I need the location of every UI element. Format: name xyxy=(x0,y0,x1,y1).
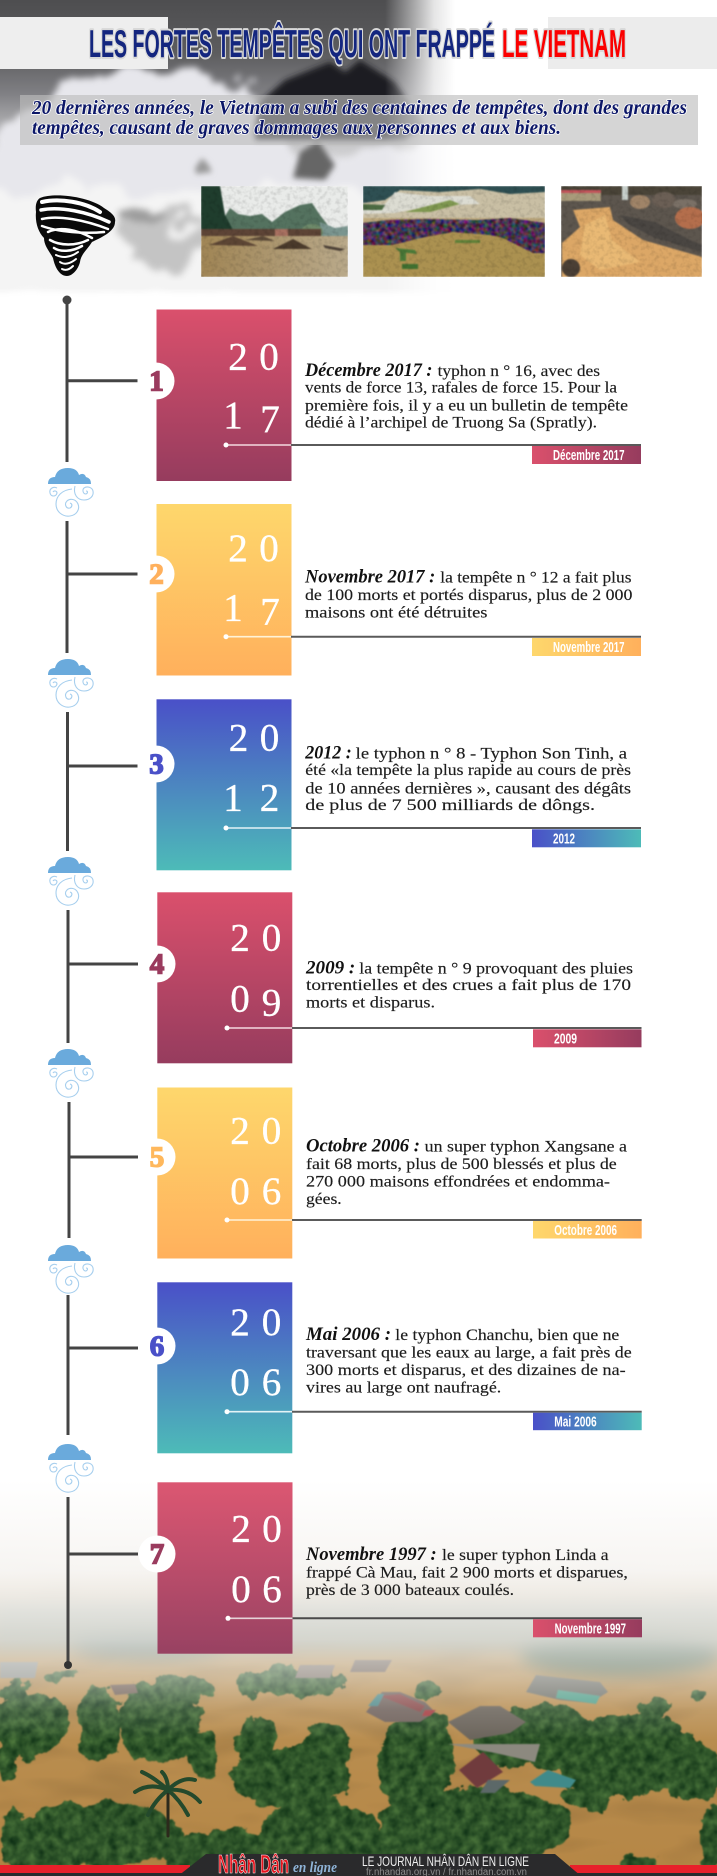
text block 4: la tempête n ° 9 provoquant des pluies xyxy=(359,958,633,977)
background: storm sky and waves xyxy=(0,0,448,290)
year card 3: 0 xyxy=(260,717,279,760)
icon: cloud and wind 4 xyxy=(48,1049,93,1097)
year card 5: 2 xyxy=(230,1109,250,1152)
year card 1: 1 xyxy=(223,394,243,437)
number badge 4: 4 xyxy=(150,948,164,980)
photo: flooded houses by karst hills xyxy=(201,186,348,277)
text block 1: première fois, il y a eu un bulletin de tempête xyxy=(305,396,628,415)
text block 3: été «la tempête la plus rapide au cours de près xyxy=(305,760,631,779)
text block 7: le super typhon Linda a xyxy=(442,1545,609,1564)
icon: cloud and wind 6 xyxy=(48,1444,93,1492)
date rule and tag 6: Mai 2006 xyxy=(554,1414,597,1431)
year card 6: 0 xyxy=(262,1301,281,1344)
timeline segment 3 xyxy=(68,712,138,851)
text block 6: le typhon Chanchu, bien que ne xyxy=(395,1325,619,1344)
year card 4: 9 xyxy=(262,982,281,1025)
number badge 5: 5 xyxy=(150,1142,164,1174)
text block 1 xyxy=(304,361,628,432)
footer text xyxy=(362,1853,529,1876)
year card 4: 0 xyxy=(230,978,250,1021)
year card 6: 2 xyxy=(230,1301,250,1344)
text block 2: de 100 morts et portés disparus, plus de 2 000 xyxy=(305,585,632,604)
year card 5 xyxy=(157,1088,292,1258)
year card 3: 2 xyxy=(260,777,279,820)
date rule and tag 6 xyxy=(292,1412,642,1431)
year card 5: 0 xyxy=(262,1109,281,1152)
icon: cloud and wind 1 xyxy=(48,468,93,516)
year card 3: 1 xyxy=(223,777,243,820)
text block 6: traversant que les eaux au large, a fait près de xyxy=(306,1342,632,1361)
number badge 3: 3 xyxy=(149,748,164,780)
entry 4 xyxy=(68,892,642,1063)
year card 7: 0 xyxy=(262,1508,282,1551)
text block 7: près de 3 000 bateaux coulés. xyxy=(306,1580,514,1599)
timeline segment 2 xyxy=(67,521,138,653)
date rule and tag 2: Novembre 2017 xyxy=(553,639,624,656)
text block 1: Décembre 2017 : xyxy=(304,361,432,381)
number badge 1: 1 xyxy=(149,366,164,398)
text block 1: vents de force 13, rafales de force 15. Pour la xyxy=(305,378,617,397)
text block 5: un super typhon Xangsane a xyxy=(425,1137,627,1156)
logo: Nhân Dân en ligne: en ligne xyxy=(293,1860,337,1876)
text block 6: 300 morts et disparus, et des dizaines de na- xyxy=(306,1360,626,1379)
photo: muddy torrent and rocks xyxy=(561,186,705,277)
year card 4: 2 xyxy=(230,917,250,960)
text block 4: torrentielles et des crues a fait plus de 170 xyxy=(306,975,631,994)
date rule and tag 3: 2012 xyxy=(553,830,575,847)
intro box xyxy=(20,95,698,145)
text block 2 xyxy=(304,568,632,622)
photo: flooded village aerial xyxy=(363,186,545,277)
timeline segment 1 xyxy=(67,300,138,462)
date rule and tag 4 xyxy=(292,1028,642,1047)
timeline: start dot xyxy=(62,296,72,304)
year card 7: 6 xyxy=(262,1568,282,1611)
text block 4: morts et disparus. xyxy=(306,993,435,1012)
year card 2: 1 xyxy=(223,587,243,630)
date rule and tag 7: Novembre 1997 xyxy=(555,1620,626,1637)
text block 4 xyxy=(305,958,633,1012)
date rule and tag 3 xyxy=(291,828,641,847)
entry 5 xyxy=(69,1088,642,1258)
entry 6 xyxy=(68,1282,642,1453)
text block 5 xyxy=(306,1137,627,1208)
date rule and tag 2 xyxy=(291,637,641,656)
date rule and tag 5: Octobre 2006 xyxy=(554,1222,617,1239)
timeline segment 6 xyxy=(68,1295,138,1435)
year card 1: 2 xyxy=(228,335,248,378)
number badge 4 xyxy=(138,946,176,982)
icon: cloud and wind 2 xyxy=(48,659,93,707)
text block 5: gées. xyxy=(306,1189,342,1208)
year card 6 xyxy=(157,1282,292,1453)
text block 7: Novembre 1997 : xyxy=(305,1545,437,1565)
year card 1: 0 xyxy=(259,335,279,378)
year card 3 xyxy=(156,699,292,870)
number badge 5 xyxy=(138,1138,176,1176)
background photo: flooded village at the bottom xyxy=(0,1536,717,1867)
text block 7 xyxy=(305,1545,628,1599)
year card 7: 0 xyxy=(231,1568,251,1611)
year card 1 xyxy=(156,310,292,481)
number badge 3 xyxy=(138,746,174,782)
text block 3: le typhon n ° 8 - Typhon Son Tinh, a xyxy=(356,743,627,762)
text block 3 xyxy=(304,743,631,814)
date rule and tag 7 xyxy=(292,1618,642,1637)
icon: cloud and wind 3 xyxy=(48,857,93,905)
icon: cloud and wind 5 xyxy=(48,1245,93,1293)
year card 2: 2 xyxy=(228,527,248,570)
entry 1 xyxy=(67,300,641,481)
text block 1: typhon n ° 16, avec des xyxy=(438,361,600,380)
year card 5: 0 xyxy=(230,1170,250,1213)
text block 7: frappé Cà Mau, fait 2 900 morts et disparues, xyxy=(306,1562,628,1581)
year card 3: 2 xyxy=(229,717,248,760)
year card 5: 6 xyxy=(262,1170,281,1213)
footer band xyxy=(0,1849,717,1876)
entry 2 xyxy=(67,504,641,676)
title bar left xyxy=(0,17,168,69)
palm tree xyxy=(135,1772,200,1836)
timeline segment 7 xyxy=(68,1497,138,1665)
date rule and tag 1 xyxy=(291,445,641,464)
entry 7 xyxy=(64,1482,642,1669)
date rule and tag 1: Décembre 2017 xyxy=(553,447,624,464)
number badge 2: 2 xyxy=(149,558,164,590)
text block 6: vires au large ont naufragé. xyxy=(306,1377,501,1396)
entry 3 xyxy=(68,699,641,870)
text block 6: Mai 2006 : xyxy=(305,1325,391,1345)
footer text: LE JOURNAL NHÂN DÂN EN LIGNE xyxy=(362,1853,529,1869)
number badge 6: 6 xyxy=(150,1330,164,1362)
year card 6: 6 xyxy=(262,1361,281,1404)
text block 5: Octobre 2006 : xyxy=(306,1137,420,1157)
text block 1: dédié à l’archipel de Truong Sa (Spratly). xyxy=(305,413,597,432)
year card 2: 7 xyxy=(260,591,280,634)
year card 1: 7 xyxy=(260,398,280,441)
date rule and tag 4: 2009 xyxy=(554,1030,577,1047)
text block 3: de plus de 7 500 milliards de dôngs. xyxy=(305,795,595,814)
year card 2 xyxy=(156,504,292,676)
text block 2: Novembre 2017 : xyxy=(304,568,435,588)
year card 2: 0 xyxy=(259,527,279,570)
intro box: 20 dernières années, le Vietnam a subi des centaines de tempêtes, dont des grandes xyxy=(31,97,687,119)
number badge 2 xyxy=(138,556,174,592)
timeline segment 5 xyxy=(69,1102,138,1238)
timeline segment 4 xyxy=(68,910,138,1043)
year card 4: 0 xyxy=(262,917,281,960)
text block 3: de 10 années dernières », causant des dégâts xyxy=(305,778,631,797)
number badge 1 xyxy=(138,362,174,400)
text block 2: maisons ont été détruites xyxy=(305,603,487,622)
year card 6: 0 xyxy=(230,1361,250,1404)
text block 5: 270 000 maisons effondrées et endomma- xyxy=(306,1172,610,1191)
title bar right xyxy=(548,17,717,69)
text block 6 xyxy=(305,1325,632,1396)
date rule and tag 5 xyxy=(292,1220,642,1239)
timeline: end dot xyxy=(64,1661,72,1669)
number badge 6 xyxy=(138,1328,176,1364)
text block 3: 2012 : xyxy=(304,743,352,763)
text block 2: la tempête n ° 12 a fait plus xyxy=(440,568,632,587)
text block 5: fait 68 morts, plus de 500 blessés et plus de xyxy=(306,1154,617,1173)
year card 4 xyxy=(157,892,292,1063)
number badge 7: 7 xyxy=(150,1538,164,1570)
icon: tornado xyxy=(36,195,115,276)
intro box: tempêtes, causant de graves dommages aux personnes et aux biens. xyxy=(32,117,561,139)
year card 7 xyxy=(158,1482,292,1654)
year card 7: 2 xyxy=(231,1508,251,1551)
number badge 7 xyxy=(138,1536,176,1572)
text block 4: 2009 : xyxy=(305,958,355,978)
